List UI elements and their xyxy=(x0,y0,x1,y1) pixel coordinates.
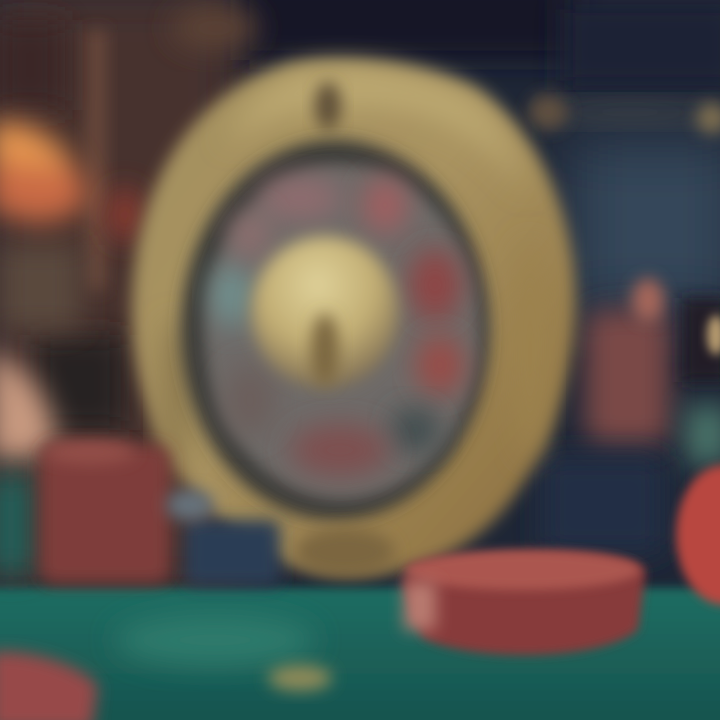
wheel: golden centre hub xyxy=(251,236,399,388)
right side chip stack xyxy=(540,278,720,555)
wheel: number pocket disc xyxy=(204,164,480,500)
wheel: golden base xyxy=(295,528,395,576)
chip: red bottom left xyxy=(0,651,98,720)
icon: orange lamp on the left xyxy=(0,120,90,222)
chip stack: red left xyxy=(40,440,170,583)
icon: peach shape on the left xyxy=(0,350,55,459)
chip stack: blue centre xyxy=(166,489,280,586)
wheel: golden outer ring xyxy=(132,60,576,576)
wheel: dark inner ring xyxy=(181,140,489,520)
chip: red circle at right edge xyxy=(676,465,720,605)
chip stack: large red foreground xyxy=(402,550,646,655)
table: green felt xyxy=(0,475,720,720)
